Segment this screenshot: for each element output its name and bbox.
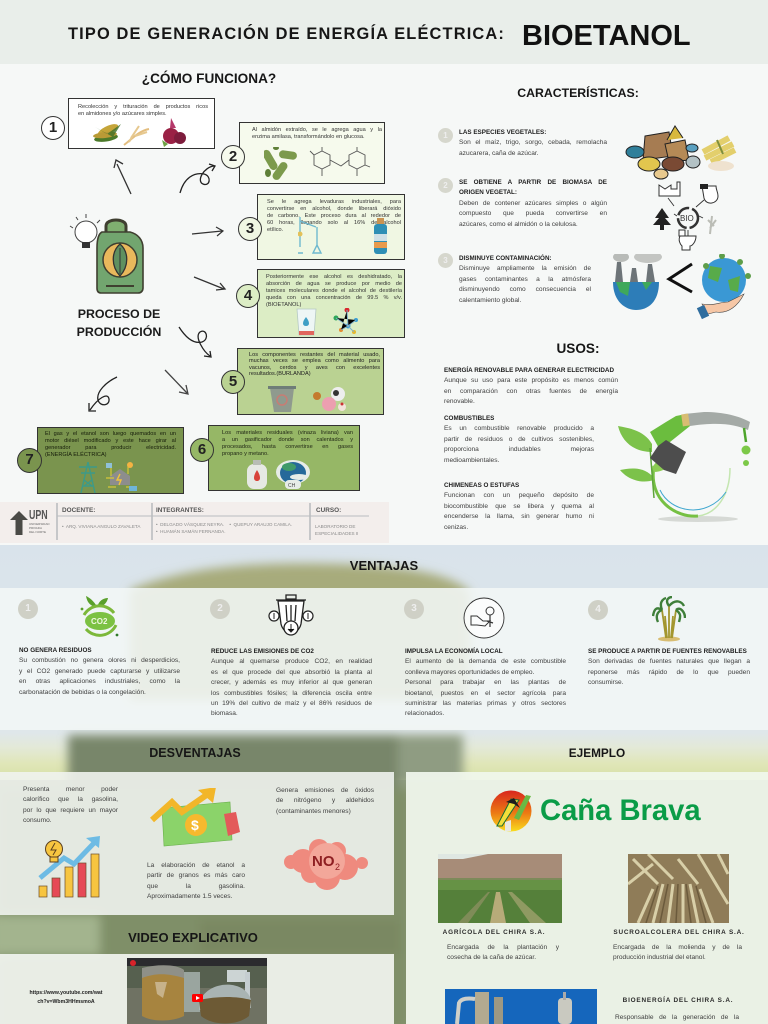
use 1 text: ENERGÍA RENOVABLE PARA GENERAR ELECTRICIDAD (444, 367, 614, 374)
heading: video explicativo: VIDEO EXPLICATIVO (128, 930, 258, 945)
icon: water glass and molecule (296, 308, 358, 336)
step 3 text: Se le agrega levaduras industriales, para (267, 199, 401, 205)
item 1 text (459, 129, 607, 157)
step 5 text: muchas veces se emplea como alimento para (249, 358, 380, 364)
advantage 3 text: relacionados. (405, 710, 444, 717)
step 2 text: enzima amilasa, transformándolo en glucosa. (252, 134, 365, 140)
icon: money with rising arrow (150, 788, 242, 850)
disadvantage 1 text: Presenta menor poder (23, 786, 118, 793)
heading: ventajas: VENTAJAS (350, 558, 418, 573)
video link: https://www.youtube.com/wat (29, 990, 102, 996)
step 5 text: vacunos, cerdos y aves con excelentes (249, 365, 380, 371)
advantage 3 text: conlleva mayores oportunidades de empleo. (405, 669, 534, 676)
text: university name (29, 522, 50, 534)
icon: NO2 cloud: NO (312, 853, 335, 870)
step 5 text: Los componentes restantes del material usado, (249, 352, 380, 358)
icon: gas cylinder and methane globe: CH (288, 483, 296, 489)
step 4 text: Posteriormente ese alcohol es deshidratado, la (266, 274, 402, 280)
icon: bag with leaf and light bulb (70, 214, 144, 294)
company 1 text: Encargada de la plantación y (447, 944, 559, 951)
icon: starch granules and glucose molecule (264, 147, 370, 180)
step 2 number (221, 145, 245, 169)
disadvantage 1 text (23, 785, 118, 827)
advantage 1 text: NO GENERA RESIDUOS (19, 647, 92, 654)
item 2 number: 2 (443, 181, 448, 190)
item 2 text: compuesto que pueda convertirse en (459, 210, 607, 217)
advantage 2 text: crecer, y además es muy inferior al que generan (211, 679, 372, 686)
step 3 text: convertirse en alcohol, donde liberará dióxido (267, 206, 401, 212)
photo: cut sugar cane (628, 854, 729, 923)
step 5 box (237, 348, 384, 415)
disadvantage 2 text: La elaboración de etanol a (147, 862, 245, 869)
step 5 number (221, 370, 245, 394)
advantage 2 text: los combustibles fósiles; la diferencia oscila entre (211, 690, 372, 697)
use 1 text: Aunque su uso para este propósito es menos común (444, 377, 618, 384)
item 3 number: 3 (443, 256, 448, 265)
item 1 text: Son el maíz, trigo, sorgo, cebada, remolacha (459, 139, 607, 146)
disadvantage 2 text: partir de granos es más caro (147, 872, 245, 879)
use 2 text: COMBUSTIBLES (444, 415, 494, 422)
use 3 text: Funcionan con un pequeño depósito de (444, 492, 594, 499)
photo: sugar cane field (438, 854, 562, 923)
step 3 number (238, 217, 262, 241)
text: university name: UNIVERSIDAD (29, 522, 50, 526)
step 4 text: (BIOETANOL) (266, 302, 301, 308)
advantage 4 text (588, 647, 750, 689)
video thumbnail (127, 958, 267, 1024)
company 2 text (613, 943, 742, 964)
advantage 3 text (405, 647, 566, 720)
label: integrantes: INTEGRANTES: (156, 507, 204, 514)
company 1 text: cosecha de la caña de azúcar. (447, 954, 536, 961)
heading: cómo funciona: ¿CÓMO FUNCIONA? (142, 71, 276, 86)
item 1 number (438, 128, 453, 143)
use 1 text (444, 366, 618, 405)
use 3 text: encenderse la llama, sin generar humo ni (444, 513, 594, 520)
step 4 text (266, 274, 402, 308)
disadvantage 3 text: de nitrógeno y aldehidos (276, 797, 374, 804)
icon: hand with coin and plant (463, 597, 505, 639)
text: integrantes names: • HUAMÁN SAMÁN FERNANDA. (156, 529, 226, 534)
advantage 3 text: El aumento de la demanda de este combustible (405, 658, 566, 665)
advantage 1 number (18, 599, 38, 619)
step 7 text: (ENERGÍA ELÉCTRICA) (45, 452, 107, 458)
title keyword: BIOETANOL (522, 20, 691, 52)
icon: bulb and rising bars (38, 834, 104, 900)
panel: ventajas (0, 588, 768, 730)
text: curso name (315, 524, 358, 536)
step 6 text: a un gasificador donde son calentados y (222, 437, 353, 443)
use 3 text: biocombustible que se libera y quema al (444, 503, 594, 510)
icon: biomass cycle (653, 182, 718, 250)
step 3 text (267, 199, 401, 233)
company 2 name: SUCROALCOLERA DEL CHIRA S.A. (613, 929, 745, 936)
advantage 3 text: suministrar las materias primas y otros sectores (405, 700, 566, 707)
icon: money with rising arrow: $ (191, 817, 199, 833)
use 3 text: CHIMENEAS O ESTUFAS (444, 482, 519, 489)
icon: power tower and smart grid (79, 462, 137, 494)
use 1 text: renovable. (444, 398, 475, 405)
advantage 1 text: Su combustión no genera olores ni desperdicios, (19, 657, 180, 664)
step 2 number: 2 (229, 148, 237, 165)
icon: arrow mark (10, 511, 28, 535)
step 1 number: 1 (49, 119, 57, 136)
icon: CO2 cycle: CO2 (91, 617, 108, 626)
step 3 text: de carbono. Este proceso dura al rededor de (267, 213, 401, 219)
use 2 text (444, 414, 594, 466)
heading: desventajas: DESVENTAJAS (149, 746, 241, 760)
item 2 number (438, 178, 453, 193)
icon: polluted earth versus healthy earth (613, 254, 751, 320)
arrow to step 4 (194, 276, 226, 291)
use 1 text: en comparación con otras fuentes de energía (444, 388, 618, 395)
heading: usos: USOS: (556, 341, 600, 356)
section: usos (444, 341, 750, 531)
step 1 text: Recolección y trituración de productos ricos (78, 104, 208, 110)
advantage 1 text: y el CO2 generado puede capturarse y utilizarse (19, 668, 180, 675)
step 3 text: etílico. (267, 227, 283, 233)
company 1 text (447, 943, 559, 964)
text: curso name: ESPECIALIDADES II (315, 531, 358, 536)
advantage 2 text (211, 647, 372, 720)
item 2 text: Deben de contener azúcares simples o algún (459, 200, 607, 207)
heading: características: CARACTERÍSTICAS: (517, 86, 639, 100)
panel: desventajas (0, 772, 394, 915)
step 6 text: procesados, hasta convertirse en gases (222, 444, 353, 450)
item 3 text: gases contaminantes a la atmósfera (459, 276, 591, 283)
use 2 text: medioambientales. (444, 457, 499, 464)
advantage 4 text: reponerse más rápido de lo que pueden (588, 669, 750, 676)
step 2 text: Al almidón extraído, se le agrega agua y la (252, 127, 382, 133)
step 4 text: tamices moleculares donde el alcohol de destilería (266, 288, 402, 294)
photo: refinery (445, 989, 597, 1024)
step 7 box (37, 427, 184, 494)
step 6 number: 6 (198, 441, 206, 458)
step 4 box (257, 269, 405, 338)
disadvantage 2 text (147, 861, 245, 903)
disadvantage 3 text (276, 786, 374, 817)
item 3 text: DISMINUYE CONTAMINACIÓN: (459, 255, 552, 262)
use 2 text: partir de residuos o de cultivos sostenibles, (444, 436, 594, 443)
text: proceso de producción: PROCESO DE (78, 307, 160, 321)
item 2 text: ORIGEN VEGETAL: (459, 189, 517, 196)
advantage 1 text (19, 646, 180, 698)
icon: grains and sugar cane (626, 125, 736, 180)
company 2 text: Encargada de la molienda y de la (613, 944, 742, 951)
title: TIPO DE GENERACIÓN DE ENERGÍA ELÉCTRICA: (68, 25, 505, 43)
footer credits panel (0, 502, 389, 543)
panel: video explicativo (0, 954, 394, 1024)
section: características (438, 86, 751, 320)
logo: UPN (10, 507, 50, 535)
panel: ejemplo (406, 772, 768, 1024)
company 3 name: BIOENERGÍA DEL CHIRA S.A. (623, 997, 733, 1004)
advantage 4 text: consumirse. (588, 679, 624, 686)
advantage 2 text: REDUCE LAS EMISIONES DE CO2 (211, 648, 314, 655)
curly arrow to step 7 (88, 376, 118, 412)
text: integrantes names: • DELGADO VÁSQUEZ NEYRA. • QUEPUY ARAUJO CAMILA. (156, 522, 292, 527)
step 4 number (236, 284, 260, 308)
advantage 3 text: bioetanol, puestos en el sector agrícola para (405, 690, 566, 697)
step 6 text: propano y metano. (222, 451, 269, 457)
step 7 text: El gas y el etanol son luego quemados en un (45, 431, 176, 437)
text: university name: DEL NORTE (29, 530, 46, 534)
arrow to step 3 (192, 226, 224, 236)
advantage 3 text: Personal para trabajar en las plantas de (405, 679, 566, 686)
step 2 text (252, 127, 382, 140)
icon: logo emblem (490, 790, 532, 832)
advantage 4 number (588, 600, 608, 620)
disadvantage 3 text: (contaminantes menores) (276, 808, 351, 815)
step 3 box (257, 194, 405, 260)
curly arrow to step 5 (178, 326, 212, 358)
text: proceso de producción (77, 307, 161, 339)
advantage 1 text: en otras aplicaciones industriales, como la (19, 678, 180, 685)
icon: sugar cane plant (652, 596, 686, 642)
disadvantage 3 text: Genera emisiones de óxidos (276, 787, 374, 794)
advantage 2 text: Aunque al quemarse produce CO2, en realidad (211, 658, 372, 665)
video link: ch?v=Wbm3HHmsmoA (37, 999, 95, 1005)
column dividers (56, 503, 369, 540)
disadvantage 2 text: que la gasolina. (147, 883, 245, 890)
step 5 number: 5 (229, 373, 237, 390)
item 3 text: disminuyendo como consecuencia el (459, 286, 591, 293)
video link (22, 989, 110, 1007)
item 2 text: SE OBTIENE A PARTIR DE BIOMASA DE (459, 179, 607, 186)
step 1 number (41, 116, 65, 140)
label: docente: DOCENTE: (62, 507, 95, 514)
text: university name: PRIVADA (29, 526, 42, 530)
icon: fuel nozzle with leaves and green ring (614, 408, 768, 526)
use 2 text: Es un combustible renovable producido a (444, 425, 594, 432)
step 7 text: motor diésel modificado y este hace girar al (45, 438, 176, 444)
advantage 3 number (404, 599, 424, 619)
heading: ejemplo: EJEMPLO (569, 746, 625, 760)
advantage 4 number: 4 (595, 604, 601, 615)
text: integrantes names (156, 522, 292, 534)
item 3 number (438, 253, 453, 268)
text: UPN: UPN (29, 507, 48, 522)
step 3 number: 3 (246, 220, 254, 237)
step 1 box (68, 98, 215, 149)
step 6 number (190, 438, 214, 462)
advantage 4 text: Son derivadas de fuentes naturales que llegan a (588, 658, 750, 665)
arrow to step 1 (113, 159, 132, 194)
icon: lab glassware and bottle (298, 217, 387, 254)
step 4 text: queda con una concentración de 99.5 % v/v. (266, 295, 402, 301)
text: curso name: LABORATORIO DE (315, 524, 355, 529)
step 4 number: 4 (244, 287, 252, 304)
step 7 number (17, 448, 42, 473)
advantage 2 text: un 19% del cultivo de maíz y el 86% residuos de (211, 700, 372, 707)
icon: gas cylinder and methane globe (247, 460, 310, 489)
text: docente name: • ARQ. VIVIANA ANGULO ZAVALETA (62, 524, 140, 529)
icon: NO2 cloud (283, 835, 373, 891)
advantage 2 text: es el que procede del que absorbió la planta al (211, 669, 372, 676)
curly arrow to step 2 (179, 163, 216, 194)
item 3 text: Disminuye ampliamente la emisión de (459, 265, 591, 272)
step 3 text: 60 horas, llegando solo al 16% de alcohol (267, 220, 401, 226)
icon: corn, wheat, beet (93, 118, 186, 147)
icon: waste container and livestock (268, 386, 346, 412)
disadvantage 2 text: Aproximadamente 1.5 veces. (147, 893, 232, 900)
step 6 text: Los materiales residuales (vinaza liviana) van (222, 430, 353, 436)
advantage 1 number: 1 (25, 603, 31, 614)
step 2 box (239, 122, 385, 184)
icon: biomass cycle: BIO (680, 214, 694, 223)
item 1 number: 1 (443, 131, 448, 140)
use 2 text: proporciona indudables mejoras (444, 446, 594, 453)
company 1 name: AGRÍCOLA DEL CHIRA S.A. (443, 929, 545, 936)
advantage 3 text: IMPULSA LA ECONOMÍA LOCAL (405, 648, 503, 655)
icon: CO2 cycle (78, 593, 122, 643)
icon: NO2 cloud: 2 (335, 862, 340, 872)
header band (0, 0, 768, 64)
advantage 2 number (210, 599, 230, 619)
item 1 text: LAS ESPECIES VEGETALES: (459, 129, 546, 136)
company 3 text: Responsable de la generación de la (615, 1014, 739, 1021)
use 3 text: cenizas. (444, 524, 468, 531)
text: Caña Brava: Caña Brava (540, 795, 701, 827)
step 5 text: resultados.(BURLANDA) (249, 371, 311, 377)
icon: bin with down arrows (268, 594, 314, 638)
logo: Caña Brava (490, 790, 690, 832)
arrow to step 6 (164, 370, 189, 395)
disadvantage 1 text: por lo que requiere un mayor (23, 807, 118, 814)
step 7 text (45, 431, 176, 458)
disadvantage 1 text: consumo. (23, 817, 52, 824)
item 2 text: azúcares, como el almidón o la celulosa. (459, 221, 578, 228)
step 6 text (222, 430, 353, 457)
step 1 text: en almidones y/o azúcares simples. (78, 111, 167, 117)
label: curso: CURSO: (316, 507, 341, 514)
item 3 text (459, 254, 591, 304)
photo background: sky and grass (0, 545, 768, 1024)
section: cómo funciona (17, 70, 405, 494)
item 3 text: calentamiento global. (459, 297, 521, 304)
company 2 text: producción industrial del etanol. (613, 954, 706, 961)
item 2 text (459, 179, 607, 228)
disadvantage 1 text: calorífico que la gasolina, (23, 796, 118, 803)
step 6 box (208, 425, 360, 491)
use 3 text (444, 481, 594, 533)
step 7 text: generador para producir electricidad. (45, 445, 176, 451)
text: proceso de producción: PRODUCCIÓN (77, 325, 161, 339)
step 7 number: 7 (25, 451, 34, 468)
advantage 2 number: 2 (217, 603, 223, 614)
item 1 text: azucarera, caña de azúcar. (459, 150, 539, 157)
step 1 text (78, 104, 208, 117)
advantage 1 text: carbonatación de bebidas o la congelación. (19, 689, 146, 696)
advantage 2 text: biomasa. (211, 710, 238, 717)
advantage 4 text: SE PRODUCE A PARTIR DE FUENTES RENOVABLES (588, 648, 747, 655)
step 5 text (249, 352, 380, 377)
advantage 3 number: 3 (411, 603, 417, 614)
step 4 text: absorción de agua se produce por medio de (266, 281, 402, 287)
